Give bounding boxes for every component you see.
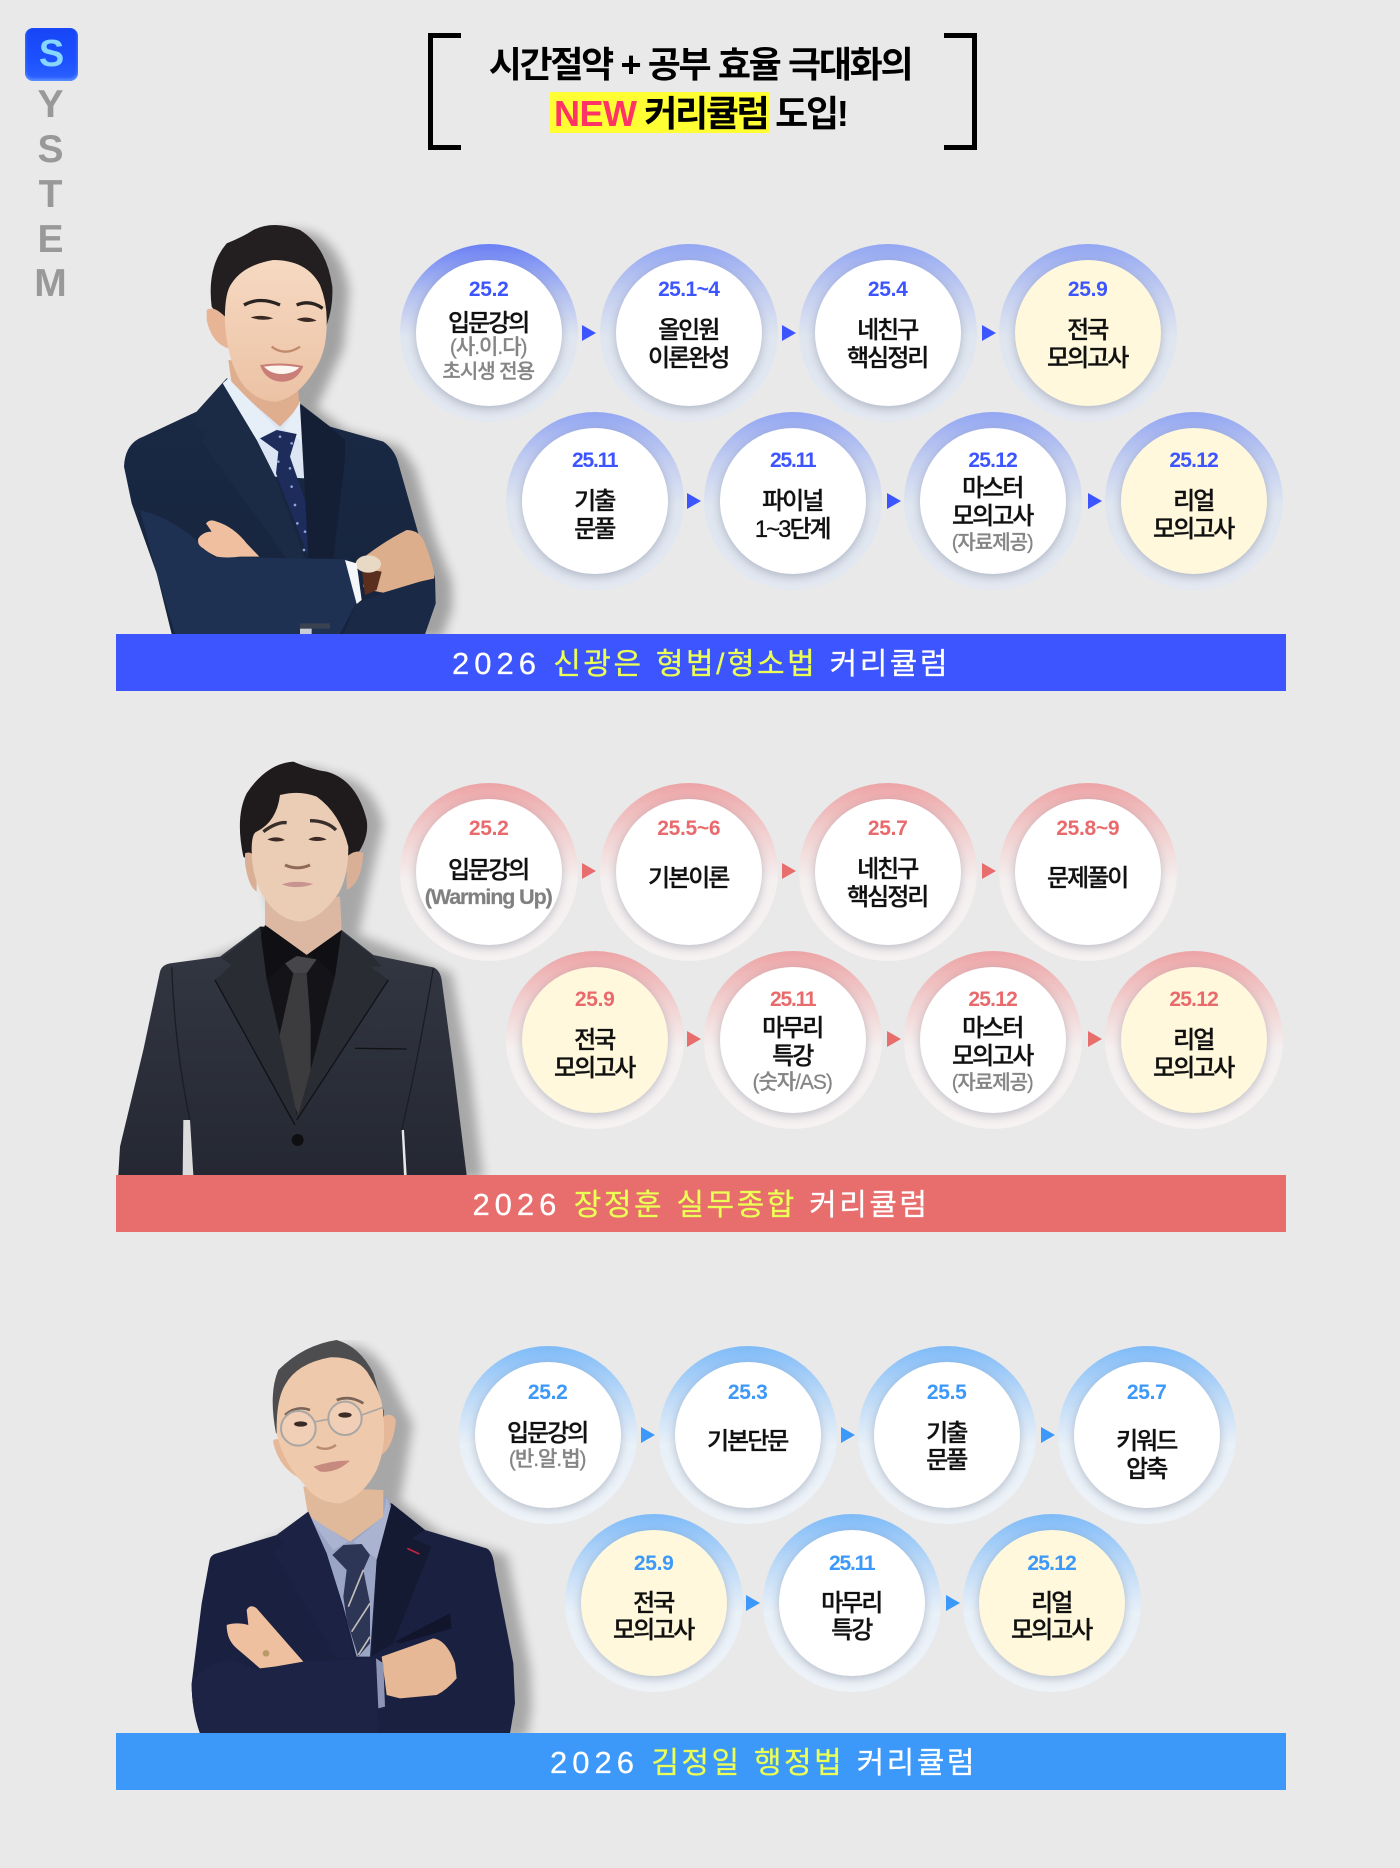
circle: 25.2 입문강의 Warming Up: 25.2	[469, 817, 509, 840]
arrow	[1041, 1427, 1055, 1443]
portrait: 김정일 lecturer with glasses	[192, 1340, 538, 1733]
icon: S badge: S	[39, 33, 64, 75]
circle: 25.8~9 문제풀이: 25.8~9	[1056, 817, 1119, 840]
left bracket	[428, 33, 461, 150]
circle: 25.9 전국 모의고사: 25.9	[575, 988, 615, 1011]
portrait: 장정훈 lecturer in dark suit	[118, 761, 488, 1175]
circle: 25.11 마무리 특강: 특강	[831, 1617, 871, 1644]
circle: 25.11 마무리 특강: 특강	[772, 1043, 812, 1070]
circle: 25.7 네친구 핵심정리	[799, 783, 977, 961]
vertical word: SYSTEM letters: Y	[37, 83, 64, 126]
circle: 25.5~6 기본이론	[600, 783, 778, 961]
circle: 25.4 네친구 핵심정리: 핵심정리	[847, 345, 927, 372]
title highlight background	[549, 92, 769, 133]
title block with brackets	[428, 33, 977, 150]
circle: 25.12 리얼 모의고사: 리얼	[1173, 488, 1213, 515]
circle: 25.12 리얼 모의고사: 모의고사	[1153, 516, 1233, 543]
circle: 25.11 마무리 특강	[704, 951, 882, 1129]
circle: 25.1~4 올인원 이론완성: 이론완성	[648, 345, 728, 372]
circle: 25.12 마스터 모의고사	[904, 412, 1082, 590]
panel: 장정훈 curriculum	[116, 761, 1286, 1232]
circle: 25.9 전국 모의고사: 전국	[574, 1027, 614, 1054]
circle: 25.2 입문강의	[400, 244, 578, 422]
circle: 25.2 입문강의 Warming Up: 입문강의	[448, 857, 528, 884]
circle: 25.12 마스터 모의고사: 마스터	[962, 475, 1022, 502]
circle: 25.11 파이널 1~3단계	[704, 412, 882, 590]
circle: 25.11 마무리 특강	[763, 1514, 941, 1692]
arrow	[641, 1427, 655, 1443]
circle: 25.12 마스터 모의고사: 25.12	[968, 449, 1017, 472]
circle: 25.11 마무리 특강: 25.11	[770, 988, 815, 1011]
arrow	[1088, 493, 1102, 509]
vertical word: SYSTEM letters	[34, 83, 67, 305]
circle: 25.12 마스터 모의고사: 25.12	[968, 988, 1017, 1011]
arrow	[582, 863, 596, 879]
circle: 25.2 입문강의: 25.2	[469, 278, 509, 301]
circle: 25.5 기출 문풀	[858, 1346, 1036, 1524]
arrow	[982, 863, 996, 879]
circle: 25.11 마무리 특강: 마무리	[821, 1590, 881, 1617]
vertical word: SYSTEM letters: M	[34, 262, 67, 305]
circle: 25.12 마스터 모의고사: 모의고사	[952, 1043, 1032, 1070]
circle: 25.12 리얼 모의고사: 모의고사	[1011, 1617, 1091, 1644]
arrow	[946, 1595, 960, 1611]
circle: 25.1~4 올인원 이론완성: 25.1~4	[658, 278, 719, 301]
title line 2: NEW 커리큘럼 도입!	[554, 93, 847, 134]
circle: 25.1~4 올인원 이론완성: 올인원	[658, 317, 718, 344]
right bracket	[944, 33, 977, 150]
circle: 25.9 전국 모의고사: 25.9	[634, 1552, 674, 1575]
circle: 25.1~4 올인원 이론완성	[600, 244, 778, 422]
circle: 25.9 전국 모의고사: 전국	[1067, 317, 1107, 344]
arrow	[1088, 1031, 1102, 1047]
banner: 김정일 행정법	[116, 1733, 1286, 1790]
circle: 25.4 네친구 핵심정리: 25.4	[868, 278, 908, 301]
circle: 25.9 전국 모의고사	[565, 1514, 743, 1692]
circle: 25.12 마스터 모의고사: 모의고사	[952, 503, 1032, 530]
banner: 신광은 형법/형소법: 2026 신광은 형법/형소법 커리큘럼	[452, 646, 950, 681]
circle: 25.2 입문강의 반.알.법: (반.알.법)	[509, 1448, 586, 1471]
circle: 25.12 리얼 모의고사	[963, 1514, 1141, 1692]
circle: 25.3 기본단문: 기본단문	[707, 1428, 787, 1455]
vertical word: SYSTEM letters: S	[37, 128, 64, 171]
arrow	[841, 1427, 855, 1443]
circle: 25.11 기출 문풀: 기출	[574, 488, 614, 515]
title line 1: 시간절약 + 공부 효율 극대화의	[489, 44, 911, 85]
circle: 25.9 전국 모의고사	[506, 951, 684, 1129]
circle: 25.12 마스터 모의고사: (자료제공)	[952, 1072, 1033, 1094]
circle: 25.5 기출 문풀: 25.5	[927, 1381, 967, 1404]
circle: 25.7 키워드 압축	[1058, 1346, 1236, 1524]
circle: 25.12 리얼 모의고사: 리얼	[1173, 1027, 1213, 1054]
circle: 25.12 리얼 모의고사: 25.12	[1027, 1552, 1076, 1575]
arrow	[782, 863, 796, 879]
circle: 25.12 마스터 모의고사	[904, 951, 1082, 1129]
circle: 25.2 입문강의 반.알.법: 입문강의	[507, 1420, 587, 1447]
banner: 김정일 행정법: 2026 김정일 행정법 커리큘럼	[550, 1745, 977, 1780]
panel: 신광은 curriculum	[116, 224, 1286, 691]
circle: 25.12 마스터 모의고사: (자료제공)	[952, 532, 1033, 554]
circle: 25.7 네친구 핵심정리: 네친구	[857, 856, 917, 883]
circle: 25.9 전국 모의고사: 모의고사	[554, 1055, 634, 1082]
circle: 25.9 전국 모의고사: 전국	[633, 1590, 673, 1617]
circle: 25.9 전국 모의고사	[999, 244, 1177, 422]
vertical word: SYSTEM letters: T	[39, 173, 62, 216]
circle: 25.2 입문강의 Warming Up: (Warming Up)	[425, 885, 552, 909]
arrow	[687, 1031, 701, 1047]
circle: 25.7 키워드 압축: 25.7	[1127, 1381, 1167, 1404]
circle: 25.2 입문강의 Warming Up	[400, 783, 578, 961]
circle: 25.4 네친구 핵심정리	[799, 244, 977, 422]
portrait: 신광은 lecturer in navy suit	[124, 224, 458, 634]
circle: 25.11 파이널 1~3단계: 파이널	[762, 488, 822, 515]
circle: 25.8~9 문제풀이: 문제풀이	[1047, 865, 1127, 892]
circle: 25.12 리얼 모의고사	[1105, 951, 1283, 1129]
banner: 장정훈 실무종합	[116, 1175, 1286, 1232]
arrow	[887, 1031, 901, 1047]
circle: 25.8~9 문제풀이	[999, 783, 1177, 961]
arrow	[887, 493, 901, 509]
circle: 25.2 입문강의: 초시생 전용	[442, 361, 534, 383]
circle: 25.11 기출 문풀: 문풀	[574, 516, 614, 543]
arrow	[582, 325, 596, 341]
banner: 장정훈 실무종합: 2026 장정훈 실무종합 커리큘럼	[472, 1187, 930, 1222]
vertical word: SYSTEM letters: E	[37, 218, 64, 261]
circle: 25.5 기출 문풀: 문풀	[926, 1447, 966, 1474]
circle: 25.12 리얼 모의고사: 모의고사	[1153, 1055, 1233, 1082]
circle: 25.11 마무리 특강: (숫자/AS)	[752, 1071, 832, 1094]
circle: 25.11 기출 문풀: 25.11	[572, 449, 617, 472]
circle: 25.5~6 기본이론: 기본이론	[648, 865, 728, 892]
arrow	[782, 325, 796, 341]
circle: 25.11 파이널 1~3단계: 25.11	[770, 449, 815, 472]
circle: 25.2 입문강의 반.알.법	[459, 1346, 637, 1524]
circle: 25.11 마무리 특강: 마무리	[762, 1015, 822, 1042]
circle: 25.4 네친구 핵심정리: 네친구	[857, 317, 917, 344]
circle: 25.7 키워드 압축: 압축	[1126, 1456, 1166, 1483]
circle: 25.2 입문강의 반.알.법: 25.2	[528, 1381, 568, 1404]
banner: 신광은 형법/형소법	[116, 634, 1286, 691]
circle: 25.3 기본단문: 25.3	[728, 1381, 768, 1404]
circle: 25.12 마스터 모의고사: 마스터	[962, 1015, 1022, 1042]
circle: 25.2 입문강의: 입문강의	[448, 310, 528, 337]
circle: 25.9 전국 모의고사: 25.9	[1068, 278, 1108, 301]
circle: 25.11 마무리 특강: 25.11	[829, 1552, 874, 1575]
circle: 25.7 네친구 핵심정리: 핵심정리	[847, 884, 927, 911]
circle: 25.12 리얼 모의고사: 리얼	[1031, 1590, 1071, 1617]
arrow	[687, 493, 701, 509]
circle: 25.3 기본단문	[659, 1346, 837, 1524]
circle: 25.12 리얼 모의고사: 25.12	[1169, 449, 1218, 472]
circle: 25.5 기출 문풀: 기출	[926, 1420, 966, 1447]
arrow	[746, 1595, 760, 1611]
circle: 25.12 리얼 모의고사	[1105, 412, 1283, 590]
circle: 25.7 네친구 핵심정리: 25.7	[868, 817, 908, 840]
circle: 25.11 파이널 1~3단계: 1~3단계	[755, 516, 830, 543]
circle: 25.2 입문강의: (사.이.다)	[450, 336, 527, 359]
panel: 김정일 curriculum	[116, 1340, 1286, 1790]
circle: 25.9 전국 모의고사: 모의고사	[1047, 345, 1127, 372]
circle: 25.7 키워드 압축: 키워드	[1116, 1428, 1176, 1455]
icon: S badge	[25, 28, 78, 81]
circle: 25.5~6 기본이론: 25.5~6	[657, 817, 720, 840]
arrow	[982, 325, 996, 341]
circle: 25.11 기출 문풀	[506, 412, 684, 590]
circle: 25.12 리얼 모의고사: 25.12	[1169, 988, 1218, 1011]
circle: 25.9 전국 모의고사: 모의고사	[613, 1617, 693, 1644]
